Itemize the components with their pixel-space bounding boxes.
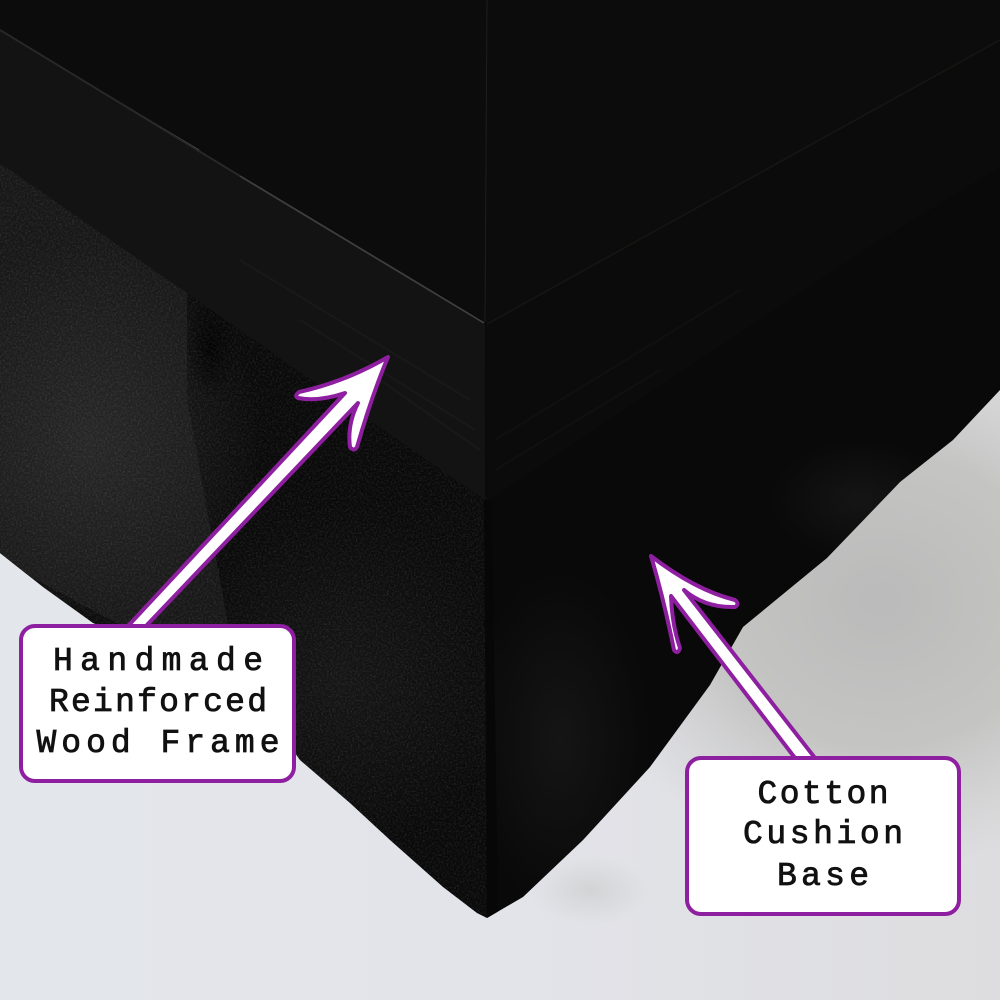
callout: cotton cushion: Cushion: [743, 816, 903, 853]
cushion base fabric: [0, 150, 1000, 950]
callout: wood frame: Wood Frame: [36, 725, 280, 762]
wooden frame: right side: [485, 40, 1000, 502]
wooden frame: top surface: [0, 0, 1000, 323]
callout: wood frame: Reinforced: [49, 684, 267, 721]
callout: cotton cushion: Base: [777, 858, 869, 895]
arrow: to wood frame: [128, 357, 388, 626]
callout: cotton cushion: Cotton: [758, 776, 888, 813]
callout: cotton cushion: [687, 758, 959, 914]
wooden frame: left side: [0, 30, 485, 500]
arrow: to cotton cushion: [651, 556, 815, 758]
callout: wood frame: [21, 626, 294, 781]
callout: wood frame: Handmade: [53, 643, 263, 680]
